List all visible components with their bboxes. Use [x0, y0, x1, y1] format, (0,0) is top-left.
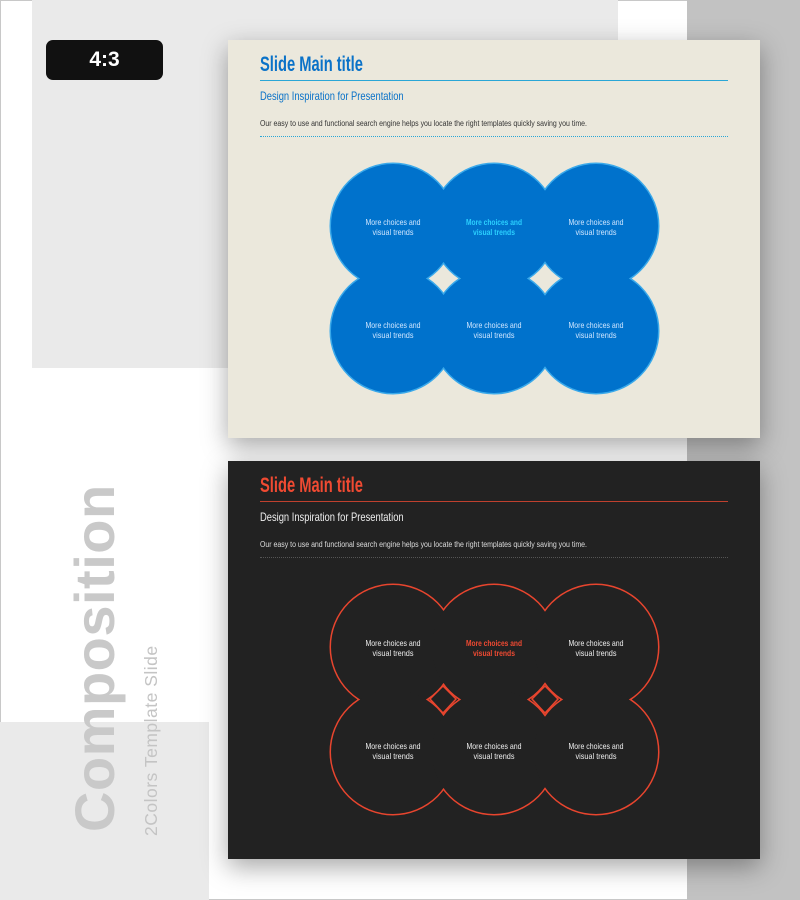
chart: red outline circles: visual trends	[474, 751, 514, 761]
chart: blue circles: visual trends	[372, 330, 414, 340]
chart: blue circles: visual trends	[576, 227, 616, 237]
badge: 4:3: 4:3	[89, 48, 120, 71]
chart: red outline circles: More choices and	[568, 741, 624, 751]
heading: Slide Main title	[260, 474, 363, 497]
body text: Our easy to use and functional search engine helps you locate the right templates quickly saving you time.	[260, 540, 587, 549]
vertical subtitle: 2Colors Template Slide	[141, 645, 161, 836]
chart: red outline circles	[330, 584, 660, 816]
chart: red outline circles: visual trends	[576, 648, 616, 658]
chart: red outline circles: More choices and	[366, 638, 421, 648]
chart: blue circles: More choices and	[466, 320, 522, 330]
chart: red outline circles: visual trends	[372, 751, 414, 761]
subtitle: Design Inspiration for Presentation	[260, 510, 404, 524]
chart: red outline circles: More choices and	[466, 638, 522, 648]
subtitle: Design Inspiration for Presentation	[260, 89, 404, 103]
chart: red outline circles: visual trends	[473, 648, 515, 658]
slide: dark red version	[228, 461, 760, 859]
chart: blue circles: visual trends	[473, 227, 515, 237]
chart: red outline circles: More choices and	[568, 638, 624, 648]
chart: blue circles: visual trends	[576, 330, 616, 340]
heading: Slide Main title	[260, 53, 363, 76]
chart: red outline circles: visual trends	[372, 648, 414, 658]
chart: blue circles: More choices and	[366, 320, 421, 330]
chart: blue circles: More choices and	[466, 217, 522, 227]
vertical title: Composition: Composition	[63, 484, 126, 832]
slide: light blue version	[228, 40, 760, 438]
chart: blue circles: visual trends	[372, 227, 414, 237]
chart: blue circles: More choices and	[568, 320, 624, 330]
chart: blue circles: More choices and	[568, 217, 624, 227]
badge: 4:3	[46, 40, 163, 80]
chart: blue circles	[330, 162, 660, 394]
chart: blue circles: visual trends	[474, 330, 514, 340]
body text: Our easy to use and functional search engine helps you locate the right templates quickly saving you time.	[260, 119, 587, 128]
chart: blue circles: More choices and	[366, 217, 421, 227]
chart: red outline circles: More choices and	[466, 741, 522, 751]
chart: red outline circles: More choices and	[366, 741, 421, 751]
chart: red outline circles: visual trends	[576, 751, 616, 761]
